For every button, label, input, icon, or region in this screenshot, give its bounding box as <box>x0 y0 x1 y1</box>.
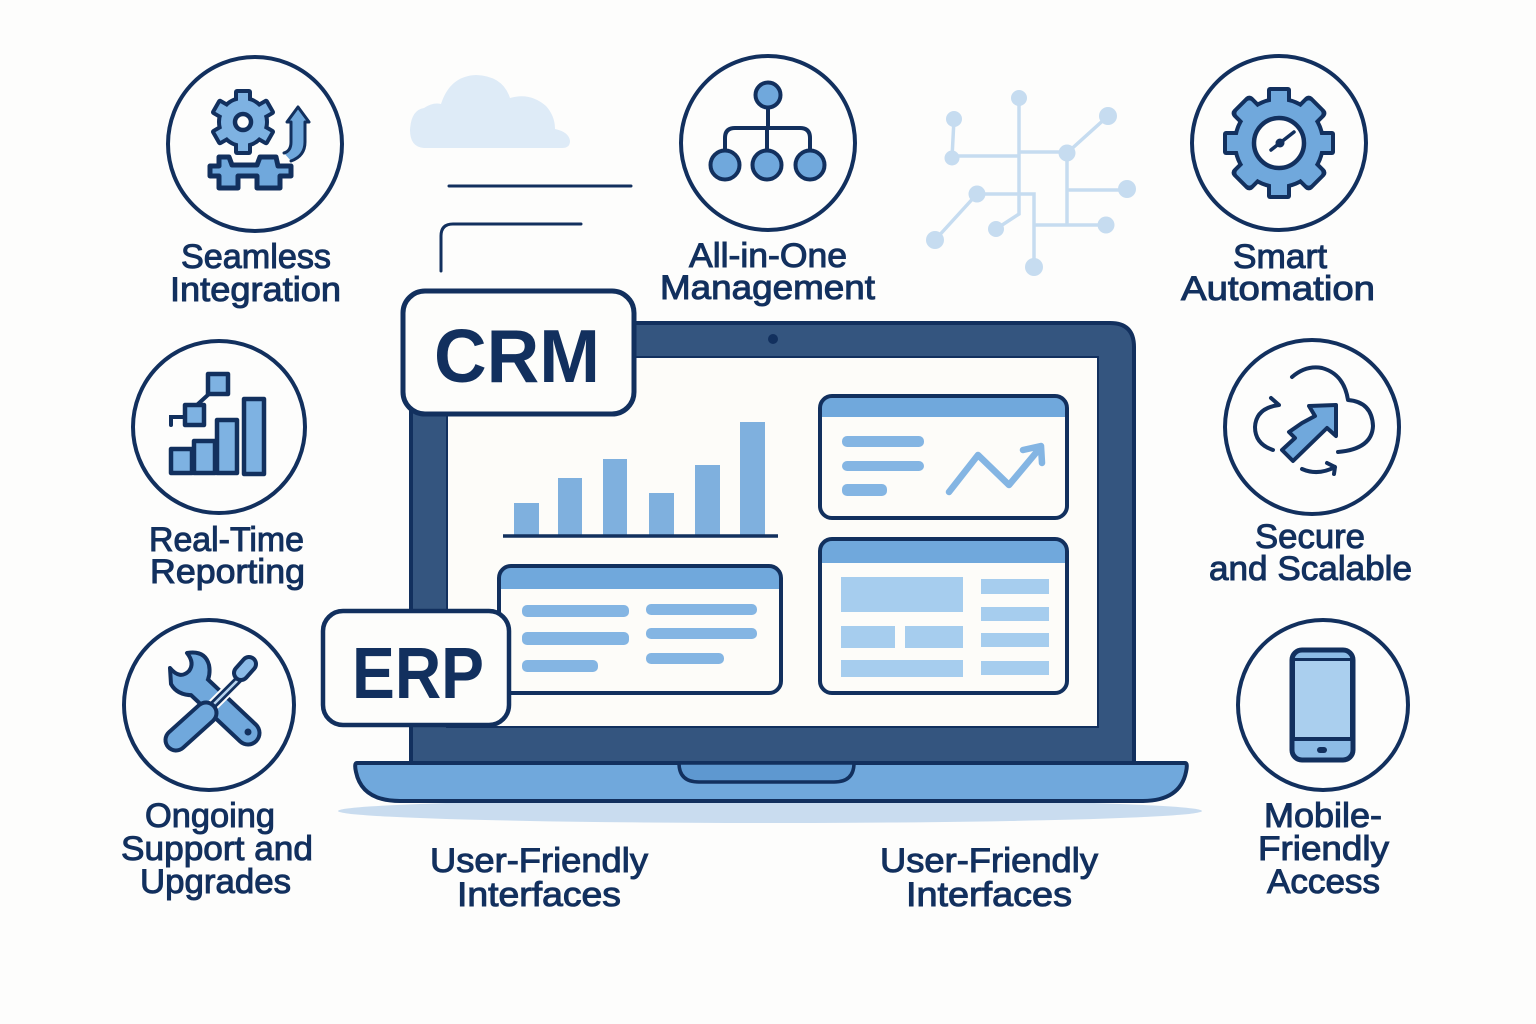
label: Smart Automation: Automation <box>1181 270 1375 308</box>
dashboard card: list <box>499 566 781 693</box>
label: All-in-One Management: Management <box>660 269 876 307</box>
label: Mobile-Friendly Access <box>1258 797 1389 901</box>
label: All-in-One Management <box>660 237 876 307</box>
label: Real-Time Reporting: Real-Time <box>149 521 304 559</box>
icon: smart automation gear <box>1192 56 1366 230</box>
label: User-Friendly Interfaces right <box>880 842 1098 914</box>
label: User-Friendly Interfaces right: Interfaces <box>906 876 1072 914</box>
laptop camera <box>768 334 778 344</box>
label: Smart Automation <box>1181 238 1375 308</box>
laptop lid <box>411 323 1134 765</box>
label: All-in-One Management: All-in-One <box>689 237 847 275</box>
label: Seamless Integration <box>170 238 341 309</box>
label: Seamless Integration: Seamless <box>181 238 331 276</box>
laptop notch <box>679 763 854 782</box>
icon: all-in-one hierarchy <box>681 56 855 230</box>
CRM badge: CRM <box>434 314 600 398</box>
label: Secure and Scalable <box>1209 518 1412 588</box>
label: Ongoing Support and Upgrades: Upgrades <box>140 863 291 901</box>
dashboard card: trend <box>820 396 1067 518</box>
label: Smart Automation: Smart <box>1233 238 1328 276</box>
label: Seamless Integration: Integration <box>170 271 341 309</box>
label: Ongoing Support and Upgrades: Ongoing <box>145 797 275 835</box>
laptop shadow <box>338 799 1202 823</box>
icon: mobile phone <box>1238 620 1408 790</box>
network diagram <box>926 90 1136 276</box>
ERP badge: ERP <box>352 634 484 714</box>
laptop <box>338 323 1202 823</box>
ERP badge <box>323 611 509 725</box>
icon: secure and scalable cloud <box>1225 340 1399 514</box>
bar chart <box>503 422 778 536</box>
label: User-Friendly Interfaces right: User-Friendly <box>880 842 1098 880</box>
CRM badge <box>403 291 634 414</box>
label: Mobile-Friendly Access: Friendly <box>1258 830 1389 868</box>
laptop screen <box>447 357 1098 727</box>
label: Secure and Scalable: and Scalable <box>1209 550 1412 588</box>
label: Mobile-Friendly Access: Access <box>1267 863 1380 901</box>
label: Secure and Scalable: Secure <box>1255 518 1365 556</box>
label: Mobile-Friendly Access: Mobile- <box>1264 797 1382 835</box>
label: Ongoing Support and Upgrades <box>121 797 313 901</box>
decorative cloud <box>410 75 570 148</box>
label: Ongoing Support and Upgrades: Support and <box>121 830 313 868</box>
label: Real-Time Reporting: Reporting <box>150 553 305 591</box>
icon: seamless integration gears <box>168 57 342 231</box>
icon: real-time reporting chart <box>133 341 305 513</box>
label: Real-Time Reporting <box>149 521 305 591</box>
dashboard card: tables <box>820 539 1067 693</box>
label: User-Friendly Interfaces left: User-Friendly <box>430 842 648 880</box>
laptop base <box>355 763 1187 801</box>
label: User-Friendly Interfaces left <box>430 842 648 914</box>
icon: ongoing support tools <box>124 620 294 790</box>
connector lines above CRM <box>441 186 631 271</box>
label: User-Friendly Interfaces left: Interfaces <box>457 876 621 914</box>
